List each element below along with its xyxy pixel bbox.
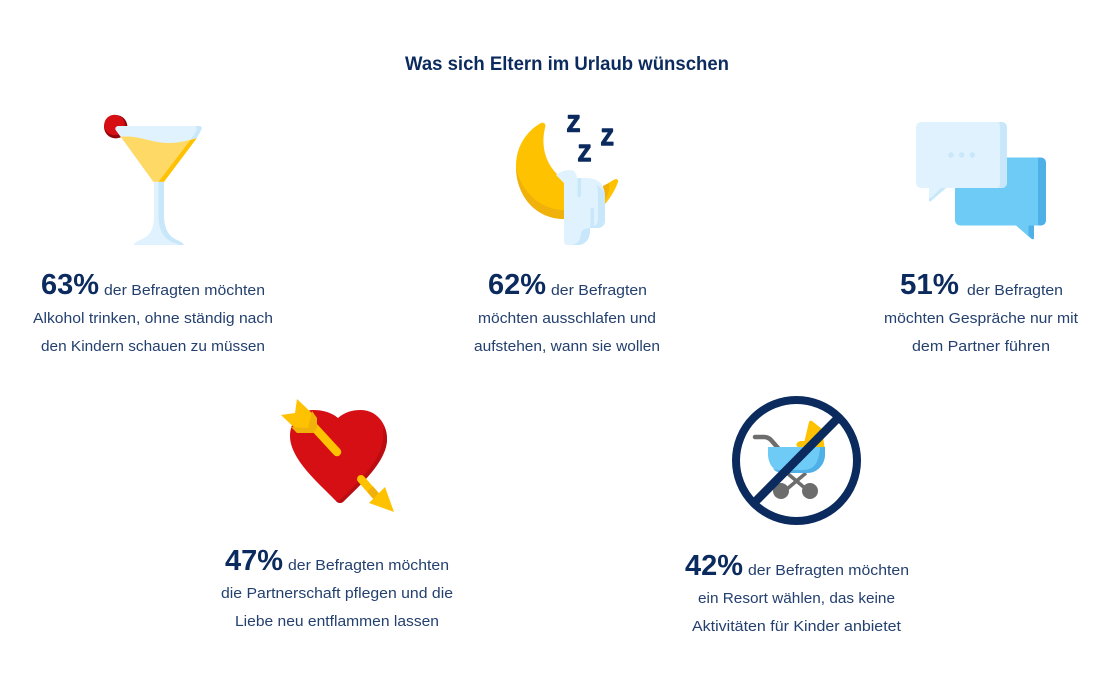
text block: 63 percent: der Befragten möchten	[104, 282, 265, 299]
text block: 51 percent: der Befragten	[967, 282, 1063, 299]
text block: 51 percent: möchten Gespräche nur mit	[884, 310, 1079, 327]
text block: 47 percent: 47%	[225, 545, 283, 577]
text block: 47 percent: Liebe neu entflammen lassen	[235, 613, 439, 630]
icon: sleeping moon	[516, 110, 618, 245]
icon: sleeping moon: Z	[578, 140, 591, 166]
text block: 47 percent	[221, 545, 453, 630]
text block: 51 percent: dem Partner führen	[912, 338, 1050, 355]
icon: sleeping moon: Z	[601, 124, 614, 150]
icon: sleeping moon: Z	[567, 110, 580, 136]
text block: 62 percent: aufstehen, wann sie wollen	[474, 338, 660, 355]
text block: 63 percent	[33, 269, 273, 355]
text block: 62 percent: möchten ausschlafen und	[478, 310, 656, 327]
text block: 63 percent: 63%	[41, 269, 99, 301]
text block: 42 percent: 42%	[685, 550, 743, 582]
text block: 63 percent: den Kindern schauen zu müssen	[41, 338, 265, 355]
icon: no stroller	[736, 400, 857, 521]
text block: 42 percent	[685, 550, 909, 635]
icon: speech bubbles	[916, 122, 1046, 239]
text block: 42 percent: ein Resort wählen, das keine	[698, 590, 895, 607]
text block: 42 percent: der Befragten möchten	[748, 562, 909, 579]
text block: 42 percent: Aktivitäten für Kinder anbietet	[692, 618, 902, 635]
text block: 47 percent: die Partnerschaft pflegen und die	[221, 585, 453, 602]
text block: 51 percent: 51%	[900, 269, 959, 301]
icon: heart with arrow	[281, 399, 394, 512]
text block: 63 percent: Alkohol trinken, ohne ständig nach	[33, 310, 273, 327]
text block: 62 percent	[474, 269, 660, 355]
text block: 62 percent: 62%	[488, 269, 546, 301]
icon: cocktail glass	[104, 115, 202, 245]
text block: 51 percent	[884, 269, 1079, 355]
text block: 47 percent: der Befragten möchten	[288, 557, 449, 574]
text block: 62 percent: der Befragten	[551, 282, 647, 299]
title: Was sich Eltern im Urlaub wünschen	[405, 54, 729, 75]
